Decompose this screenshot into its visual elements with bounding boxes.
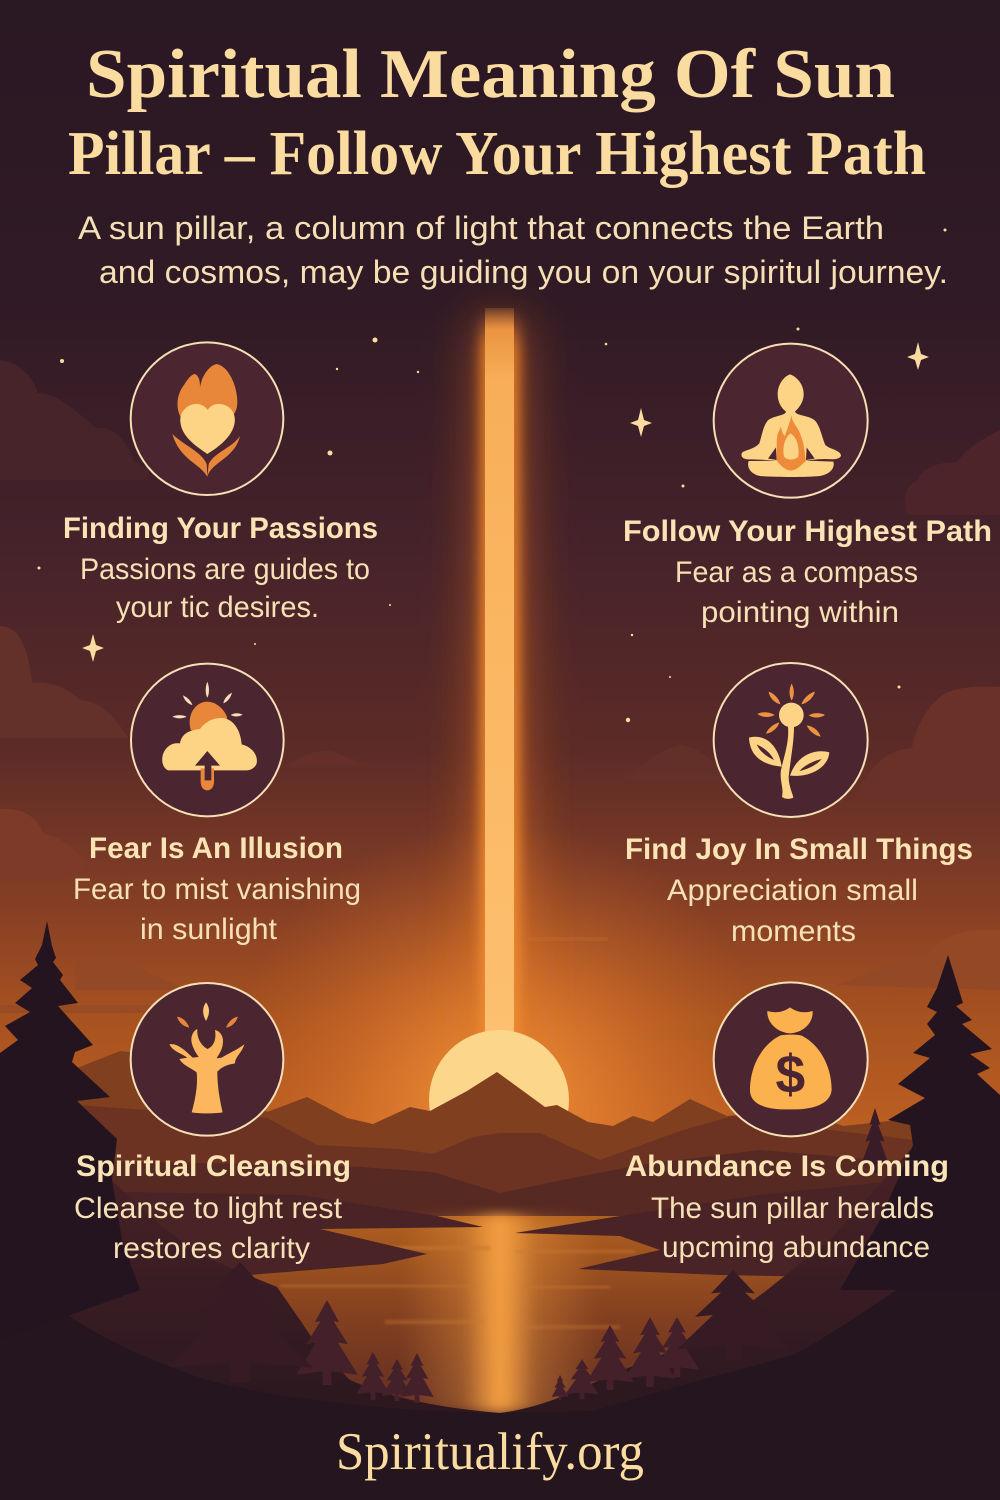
icon: meditating figure [714, 344, 868, 498]
icon: flower with sun rays [714, 663, 868, 817]
description: Passions are guides to [80, 553, 370, 586]
heading: Finding Your Passions [63, 512, 378, 545]
icon: money bag: $ [775, 1045, 805, 1104]
icon: money bag [714, 982, 868, 1136]
heading: Fear Is An Illusion [89, 832, 343, 865]
description: The sun pillar heralds [651, 1192, 934, 1225]
title: Spiritual Meaning Of Sun [86, 36, 895, 113]
description: Appreciation small [667, 874, 918, 907]
panel: find joy in small things [625, 663, 973, 948]
subtitle: A sun pillar, a column of light that connects the Earth [78, 210, 884, 246]
description [651, 1192, 934, 1264]
shoreline spits [0, 1170, 1000, 1290]
icon: raised hands with light [131, 983, 283, 1136]
subtitle [78, 210, 948, 290]
panel: spiritual cleansing [74, 983, 351, 1265]
tree: right pine [840, 955, 1000, 1290]
icon: sun behind cloud with arrow [131, 664, 284, 816]
horizon glow [150, 830, 850, 1230]
description: Fear to mist vanishing [73, 873, 361, 906]
description: Cleanse to light rest [74, 1192, 343, 1225]
sun pillar [470, 300, 530, 1100]
description: in sunlight [140, 913, 278, 946]
distant mountains [0, 1051, 1000, 1300]
heading: Spiritual Cleansing [76, 1150, 351, 1183]
description [667, 874, 918, 948]
heading: Abundance Is Coming [625, 1150, 949, 1183]
subtitle: and cosmos, may be guiding you on your spiritul journey. [99, 254, 948, 290]
footer brand: Spiritualify.org [336, 1423, 644, 1481]
sun [429, 1030, 569, 1170]
description: Fear as a compass [675, 556, 918, 589]
description: restores clarity [113, 1232, 310, 1265]
description: pointing within [701, 596, 899, 629]
heading: Follow Your Highest Path [623, 515, 992, 548]
heading: Find Joy In Small Things [625, 833, 973, 866]
stars [38, 228, 946, 722]
panel: abundance is coming [625, 982, 949, 1264]
icon: flaming heart [131, 342, 283, 495]
tree: small right pine [861, 1108, 889, 1173]
title: Pillar – Follow Your Highest Path [68, 120, 926, 188]
description [675, 556, 918, 629]
lake [0, 1216, 1000, 1416]
panel: fear is an illusion [73, 664, 361, 946]
panel: follow your highest path [623, 344, 992, 629]
description [74, 1192, 343, 1265]
description: your tic desires. [116, 591, 319, 624]
description: moments [731, 915, 856, 948]
description [73, 873, 361, 946]
title [68, 36, 926, 188]
clouds [0, 360, 1000, 1040]
description [80, 553, 370, 624]
tree: left pine [0, 921, 140, 1340]
panel: finding your passions [63, 342, 378, 624]
mid hills and small trees [0, 1100, 1000, 1500]
description: upcming abundance [662, 1231, 930, 1264]
dark foreground [0, 1230, 1000, 1500]
